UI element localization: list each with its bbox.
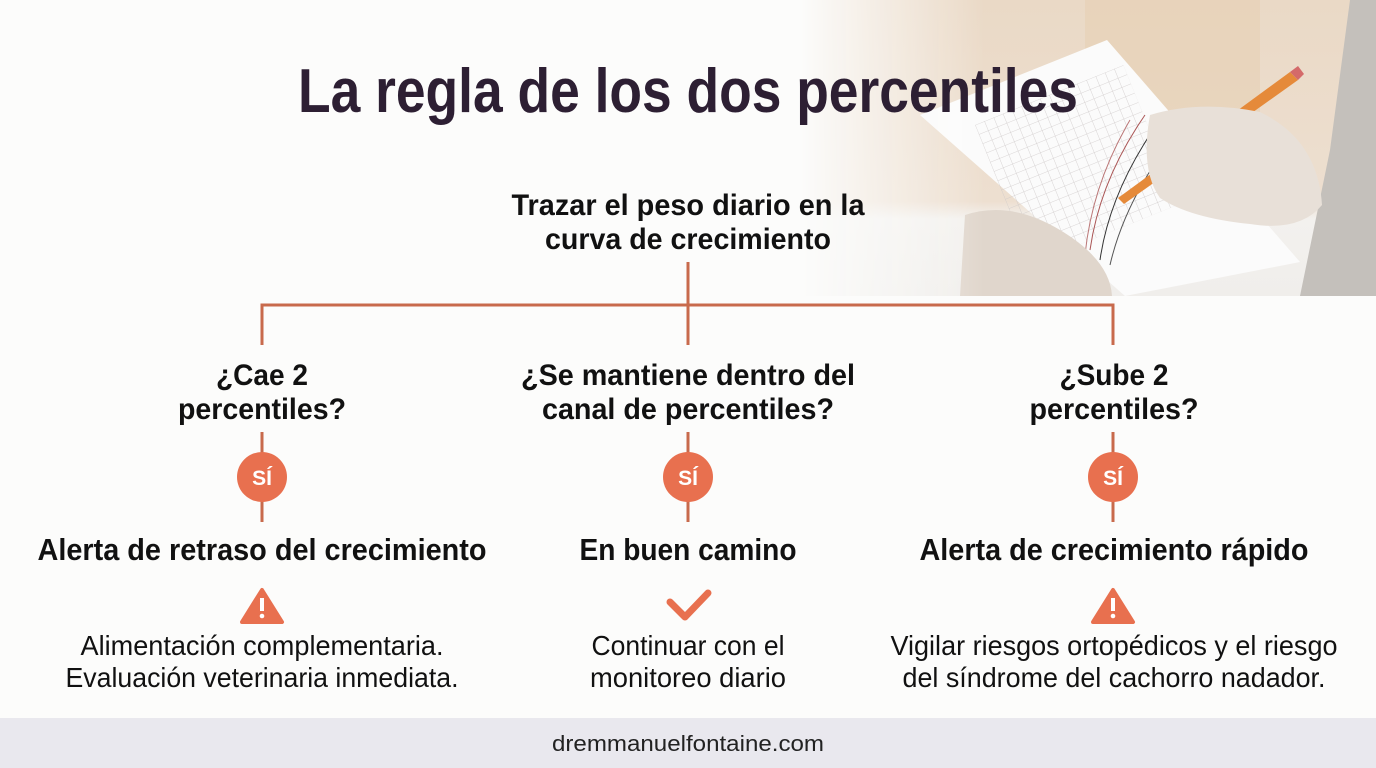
branch: falls 2 percentiles: Evaluación veterinaria inmediata. (66, 662, 458, 693)
branch: falls 2 percentiles: SÍ (252, 467, 273, 490)
branch: rises 2 percentiles (890, 359, 1338, 693)
branch: falls 2 percentiles: ¿Cae 2 (216, 359, 308, 392)
root node text: Trazar el peso diario en la (512, 189, 865, 222)
branch: rises 2 percentiles: del síndrome del cachorro nadador. (902, 662, 1326, 693)
branch: rises 2 percentiles: SÍ (1103, 467, 1124, 490)
branch: stays in channel: canal de percentiles? (542, 393, 834, 426)
root node text (512, 189, 865, 256)
root node text: curva de crecimiento (545, 223, 831, 256)
branch: falls 2 percentiles: Alimentación complementaria. (80, 630, 444, 661)
branch: rises 2 percentiles: ¿Sube 2 (1060, 359, 1168, 392)
branch: falls 2 percentiles: percentiles? (178, 393, 346, 426)
footer: dremmanuelfontaine.com (552, 731, 824, 756)
branch: stays in channel: SÍ (678, 467, 699, 490)
branch: stays in channel: En buen camino (580, 532, 796, 567)
branch: stays in channel: monitoreo diario (590, 662, 786, 693)
branch: stays in channel: ¿Se mantiene dentro del (521, 359, 855, 392)
connector tree (262, 262, 1113, 522)
branch: rises 2 percentiles: Vigilar riesgos ortopédicos y el riesgo (890, 630, 1338, 661)
branch: stays in channel: Continuar con el (592, 630, 784, 661)
branch: falls 2 percentiles: Alerta de retraso del crecimiento (38, 532, 486, 567)
branch: falls 2 percentiles (38, 359, 486, 693)
branch: rises 2 percentiles: Alerta de crecimiento rápido (920, 532, 1308, 567)
photo: hand plotting growth chart (800, 0, 1376, 296)
branch: stays in channel (521, 359, 855, 693)
branch: rises 2 percentiles: percentiles? (1030, 393, 1198, 426)
title: La regla de los dos percentiles (298, 57, 1078, 126)
footer (0, 718, 1376, 768)
